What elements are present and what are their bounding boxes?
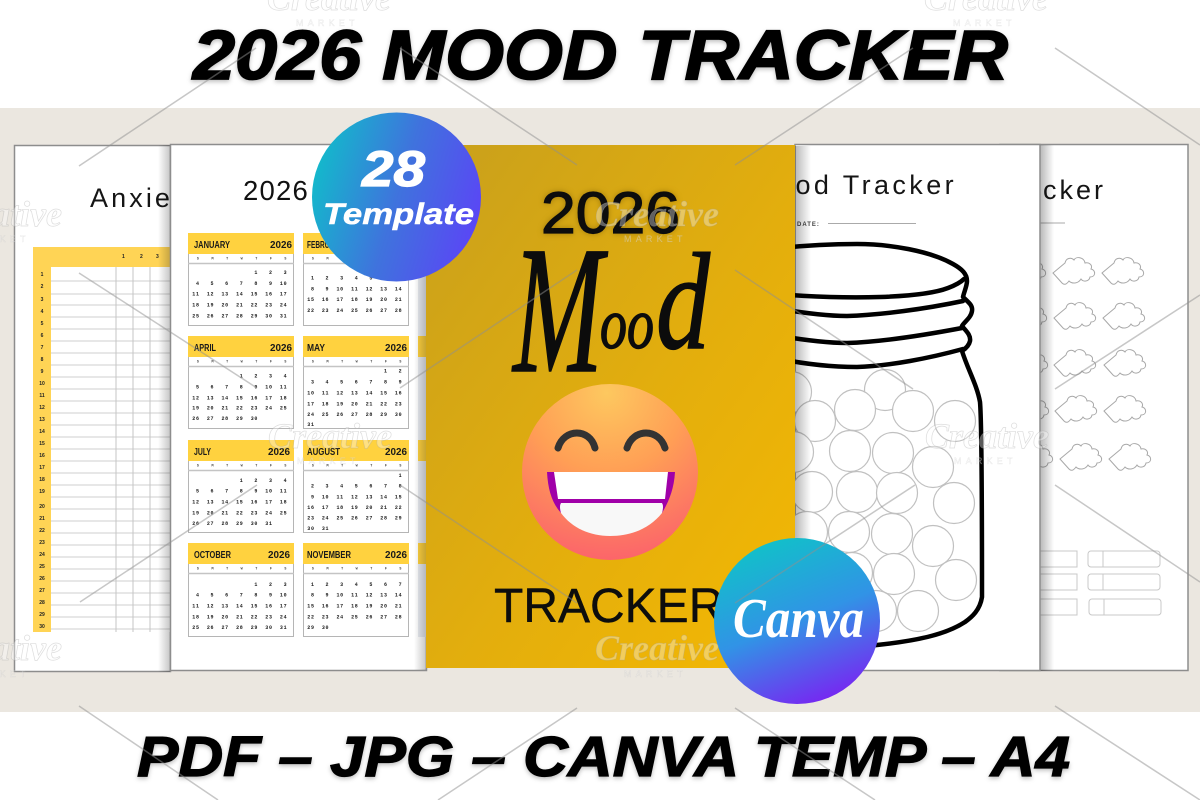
calendar: april: 26 27 28 29 30 [185, 416, 258, 422]
table: anxiety log: 29 [39, 612, 45, 618]
calendar: may: 2026 [385, 342, 407, 354]
watermark: creative market marks [0, 0, 1049, 679]
calendar: july: 19 20 21 22 23 24 25 [185, 510, 287, 516]
calendar: october: S M T W T F S [186, 568, 288, 572]
calendar: february: 2026 [385, 239, 407, 251]
table: anxiety log: 22 [39, 528, 45, 534]
cover script title: M [511, 210, 608, 411]
table: anxiety log: 2 [41, 284, 44, 290]
calendar: may [300, 336, 409, 428]
table: anxiety log: 10 [39, 381, 45, 387]
calendar: october: 1 2 3 [185, 582, 287, 588]
badge: 28 template: Template [323, 198, 474, 231]
calendar: july [185, 440, 294, 532]
calendar: april: 1 2 3 4 [185, 374, 287, 380]
calendar: january: 4 5 6 7 8 9 10 [185, 281, 287, 287]
calendar: august: S M T W T F S [301, 464, 403, 468]
icons: cloud grid [1004, 258, 1151, 470]
calendar: may: 24 25 26 27 28 29 30 [300, 412, 402, 418]
calendar: july: S M T W T F S [186, 464, 288, 468]
calendar: october: 2026 [268, 549, 290, 561]
calendar: april: 19 20 21 22 23 24 25 [185, 406, 287, 412]
icon: mason jar outline [780, 244, 982, 650]
table: anxiety log: 20 [39, 504, 45, 510]
calendar: october [185, 543, 294, 636]
calendar: january [185, 233, 294, 326]
calendar: july: 1 2 3 4 [185, 478, 287, 484]
cover year: 2026 [541, 181, 680, 246]
table: anxiety log: 9 [41, 369, 44, 375]
watermark: creative market marks: MARKET [624, 669, 687, 679]
calendar: august: 16 17 18 19 20 21 22 [300, 505, 402, 511]
calendar: august: 9 10 11 12 13 14 15 [300, 494, 402, 500]
calendar: november: 8 9 10 11 12 13 14 [300, 593, 402, 599]
calendar: february: 8 9 10 11 12 13 14 [300, 286, 402, 292]
calendar: january: 2026 [270, 239, 292, 251]
calendar: january: 1 2 3 [185, 270, 287, 276]
watermark: creative market marks: MARKET [624, 234, 687, 244]
table: anxiety log: 25 [39, 564, 45, 570]
watermark: creative market marks: Creative [595, 194, 719, 234]
table: anxiety log: 26 [39, 576, 45, 582]
table: anxiety log: 18 [39, 477, 45, 483]
third calendar column edge [418, 233, 426, 637]
calendar: november: 15 16 17 18 19 20 21 [300, 604, 402, 610]
calendar: august: AUGUST [307, 446, 340, 458]
calendar: february: FEBRUARY [307, 239, 343, 251]
calendar: august: 1 [300, 473, 402, 479]
calendar: may: 1 2 [300, 369, 402, 375]
table: anxiety log: 23 [39, 540, 45, 546]
date field: DATE: [797, 222, 820, 228]
calendar: november: NOVEMBER [307, 549, 351, 561]
date field [797, 222, 916, 228]
calendar: may: 31 [300, 422, 315, 428]
calendar: august: 2 3 4 5 6 7 8 [300, 483, 402, 489]
badge: 28 template: 28 [361, 141, 425, 197]
calendar: july: 26 27 28 29 30 31 [185, 521, 273, 527]
form: note rows [1020, 551, 1161, 615]
table: anxiety log: 27 [39, 588, 45, 594]
calendar: may: 17 18 19 20 21 22 23 [300, 401, 402, 407]
calendar: may: S M T W T F S [301, 360, 403, 364]
calendar: january: S M T W T F S [186, 258, 288, 262]
table: anxiety log: 7 [41, 345, 44, 351]
heading: mood tracker: Tracker [994, 175, 1106, 205]
calendar: april: 12 13 14 15 16 17 18 [185, 395, 287, 401]
calendar: october: 25 26 27 28 29 30 31 [185, 625, 287, 631]
badge: canva [714, 538, 880, 704]
calendar: november: 2026 [385, 549, 407, 561]
calendar: october: 18 19 20 21 22 23 24 [185, 615, 287, 621]
table: anxiety log: 19 [39, 489, 45, 495]
table: anxiety log [33, 247, 170, 632]
calendar: november: S M T W T F S [301, 568, 403, 572]
heading: calendar: 2026 [243, 175, 309, 206]
table: anxiety log: 3 [156, 254, 159, 260]
calendar: february [300, 233, 409, 326]
calendar: may: MAY [307, 342, 325, 354]
table: anxiety log: 21 [39, 516, 45, 522]
table: anxiety log: 11 [39, 393, 45, 399]
calendar: october: 11 12 13 14 15 16 17 [185, 604, 287, 610]
table: anxiety log: 30 [39, 624, 45, 630]
table: anxiety log: 16 [39, 453, 45, 459]
badge: 28 template [312, 112, 481, 282]
table: anxiety log: 28 [39, 600, 45, 606]
watermark: creative market marks: MARKET [296, 18, 359, 28]
background band [0, 108, 1200, 712]
calendar: august: 23 24 25 26 27 28 29 [300, 516, 402, 522]
calendar: november: 29 30 [300, 625, 329, 631]
calendar: may: 3 4 5 6 7 8 9 [300, 380, 402, 386]
heading: mood tracker: Mood Tracker [751, 170, 957, 200]
table: anxiety log: 14 [39, 429, 45, 435]
calendar: july: 2026 [268, 446, 290, 458]
calendar: may: 10 11 12 13 14 15 16 [300, 390, 402, 396]
table: anxiety log: 24 [39, 552, 45, 558]
table: anxiety log: 1 [122, 254, 125, 260]
calendar: february: S M T W T F S [301, 258, 403, 262]
calendar: april: S M T W T F S [186, 360, 288, 364]
calendar: february: 22 23 24 25 26 27 28 [300, 308, 402, 314]
table: anxiety log: 17 [39, 465, 45, 471]
title: 2026 MOOD TRACKER [191, 16, 1008, 94]
calendar: april: APRIL [194, 342, 216, 354]
table: anxiety log: 15 [39, 441, 45, 447]
subtitle: file formats: PDF – JPG – CANVA TEMP – A4 [137, 725, 1070, 789]
table: anxiety log: 4 [41, 309, 44, 315]
calendar: august: 2026 [385, 446, 407, 458]
calendar: october: OCTOBER [194, 549, 231, 561]
watermark: creative market marks: MARKET [953, 18, 1016, 28]
panel: jar tracker page [751, 144, 1054, 671]
calendar: october: 4 5 6 7 8 9 10 [185, 593, 287, 599]
cover subtitle: TRACKER [494, 580, 723, 633]
table: anxiety log: 2 [140, 254, 143, 260]
table: anxiety log: 5 [41, 321, 44, 327]
cover script title: oo [600, 284, 654, 364]
calendar: november: 1 2 3 4 5 6 7 [300, 582, 402, 588]
calendar: july: 12 13 14 15 16 17 18 [185, 499, 287, 505]
watermark: creative market marks: Creative [925, 416, 1049, 456]
table: anxiety log: 12 [39, 405, 45, 411]
panel: cover [414, 145, 811, 670]
panel: anxiety tracker page [14, 146, 200, 672]
calendar: april: 2026 [270, 342, 292, 354]
icon: grinning emoji [522, 384, 698, 560]
calendar: february: 15 16 17 18 19 20 21 [300, 297, 402, 303]
calendar: january: 11 12 13 14 15 16 17 [185, 292, 287, 298]
chart: mood jar bubbles [770, 370, 976, 632]
calendar: july: 5 6 7 8 9 10 11 [185, 488, 287, 494]
calendar: february: 1 2 3 4 5 6 7 [300, 276, 402, 282]
calendar: april: 5 6 7 8 9 10 11 [185, 385, 287, 391]
table: anxiety log: 1 [41, 272, 44, 278]
calendar: january: 18 19 20 21 22 23 24 [185, 302, 287, 308]
watermark: creative market marks: MARKET [297, 456, 360, 466]
watermark: creative market marks: Creative [595, 628, 719, 668]
calendar: november: 22 23 24 25 26 27 28 [300, 615, 402, 621]
table: anxiety log: 8 [41, 357, 44, 363]
panel: calendar page [158, 144, 426, 672]
cover script title: d [656, 225, 711, 378]
calendar: july: JULY [194, 446, 211, 458]
table: anxiety log: 3 [41, 297, 44, 303]
calendar: november [300, 543, 409, 636]
panel: cloud tracker page [994, 144, 1188, 670]
watermark: creative market marks: Creative [268, 416, 392, 456]
calendar: august [300, 440, 409, 532]
heading: anxiety tracker: Anxiety [90, 183, 200, 213]
table: anxiety log: 13 [39, 417, 45, 423]
watermark: creative market marks: MARKET [954, 456, 1017, 466]
calendar: january: JANUARY [194, 239, 230, 251]
table: anxiety log: 6 [41, 333, 44, 339]
badge: canva: Canva [733, 588, 864, 650]
calendar: january: 25 26 27 28 29 30 31 [185, 313, 287, 319]
calendar: april [185, 336, 294, 428]
calendar: august: 30 31 [300, 526, 329, 532]
